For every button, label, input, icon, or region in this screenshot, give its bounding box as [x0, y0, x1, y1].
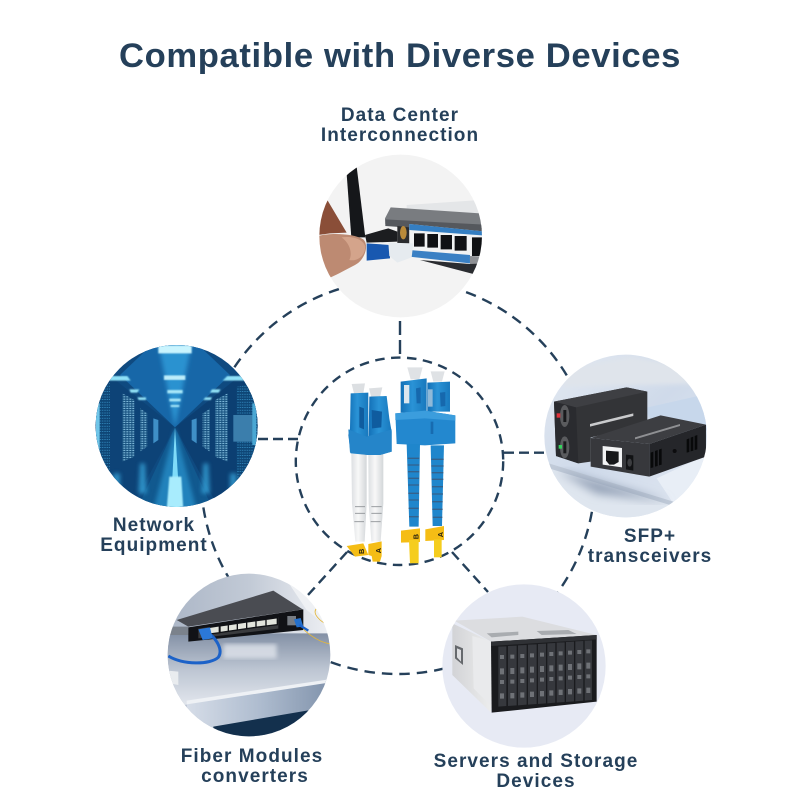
label: fiber modules converters: Fiber Modules [181, 746, 323, 767]
label: network equipment [100, 515, 208, 556]
label: servers and storage devices: Servers and Storage [434, 751, 638, 772]
photo: glowing blue data center aisle [96, 345, 258, 507]
photo: black HDMI extender boxes [544, 354, 707, 518]
label: network equipment: Network [113, 515, 195, 536]
label: servers and storage devices [434, 751, 638, 792]
label: fiber modules converters [181, 746, 323, 787]
server blades [498, 640, 592, 707]
label: SFP+ transceivers [588, 526, 712, 567]
label: SFP+ transceivers: SFP+ [624, 526, 676, 547]
LC duplex connector with white boots: A [374, 547, 383, 553]
panel: network equipment [96, 345, 258, 555]
photo: blade server chassis [442, 584, 606, 748]
label: data center interconnection: Interconnection [321, 125, 479, 146]
title: Compatible with Diverse Devices [119, 37, 681, 75]
dashed connector network [201, 280, 595, 674]
panel: servers and storage devices [434, 580, 638, 792]
SC duplex connector with blue boots: B [412, 534, 421, 539]
panel: central fiber connectors [347, 367, 455, 563]
panel: fiber modules converters [168, 574, 330, 782]
photo: network switch with blue and yellow cables [168, 574, 330, 736]
LC duplex connector with white boots: B [357, 549, 366, 554]
label: fiber modules converters: converters [201, 766, 309, 787]
label: data center interconnection [321, 105, 479, 146]
label: SFP+ transceivers: transceivers [588, 546, 712, 567]
label: servers and storage devices: Devices [496, 771, 576, 792]
panel: SFP+ transceivers [544, 354, 710, 562]
label: data center interconnection: Data Center [341, 105, 459, 126]
SC duplex connector with blue boots [395, 367, 455, 563]
panel: data center interconnection [319, 108, 482, 318]
blade detail marks [500, 649, 590, 699]
photo: router with hand plugging in cable [319, 154, 482, 318]
label: network equipment: Equipment [100, 535, 208, 556]
LC duplex connector with white boots [347, 383, 392, 562]
SC duplex connector with blue boots: A [436, 531, 445, 537]
